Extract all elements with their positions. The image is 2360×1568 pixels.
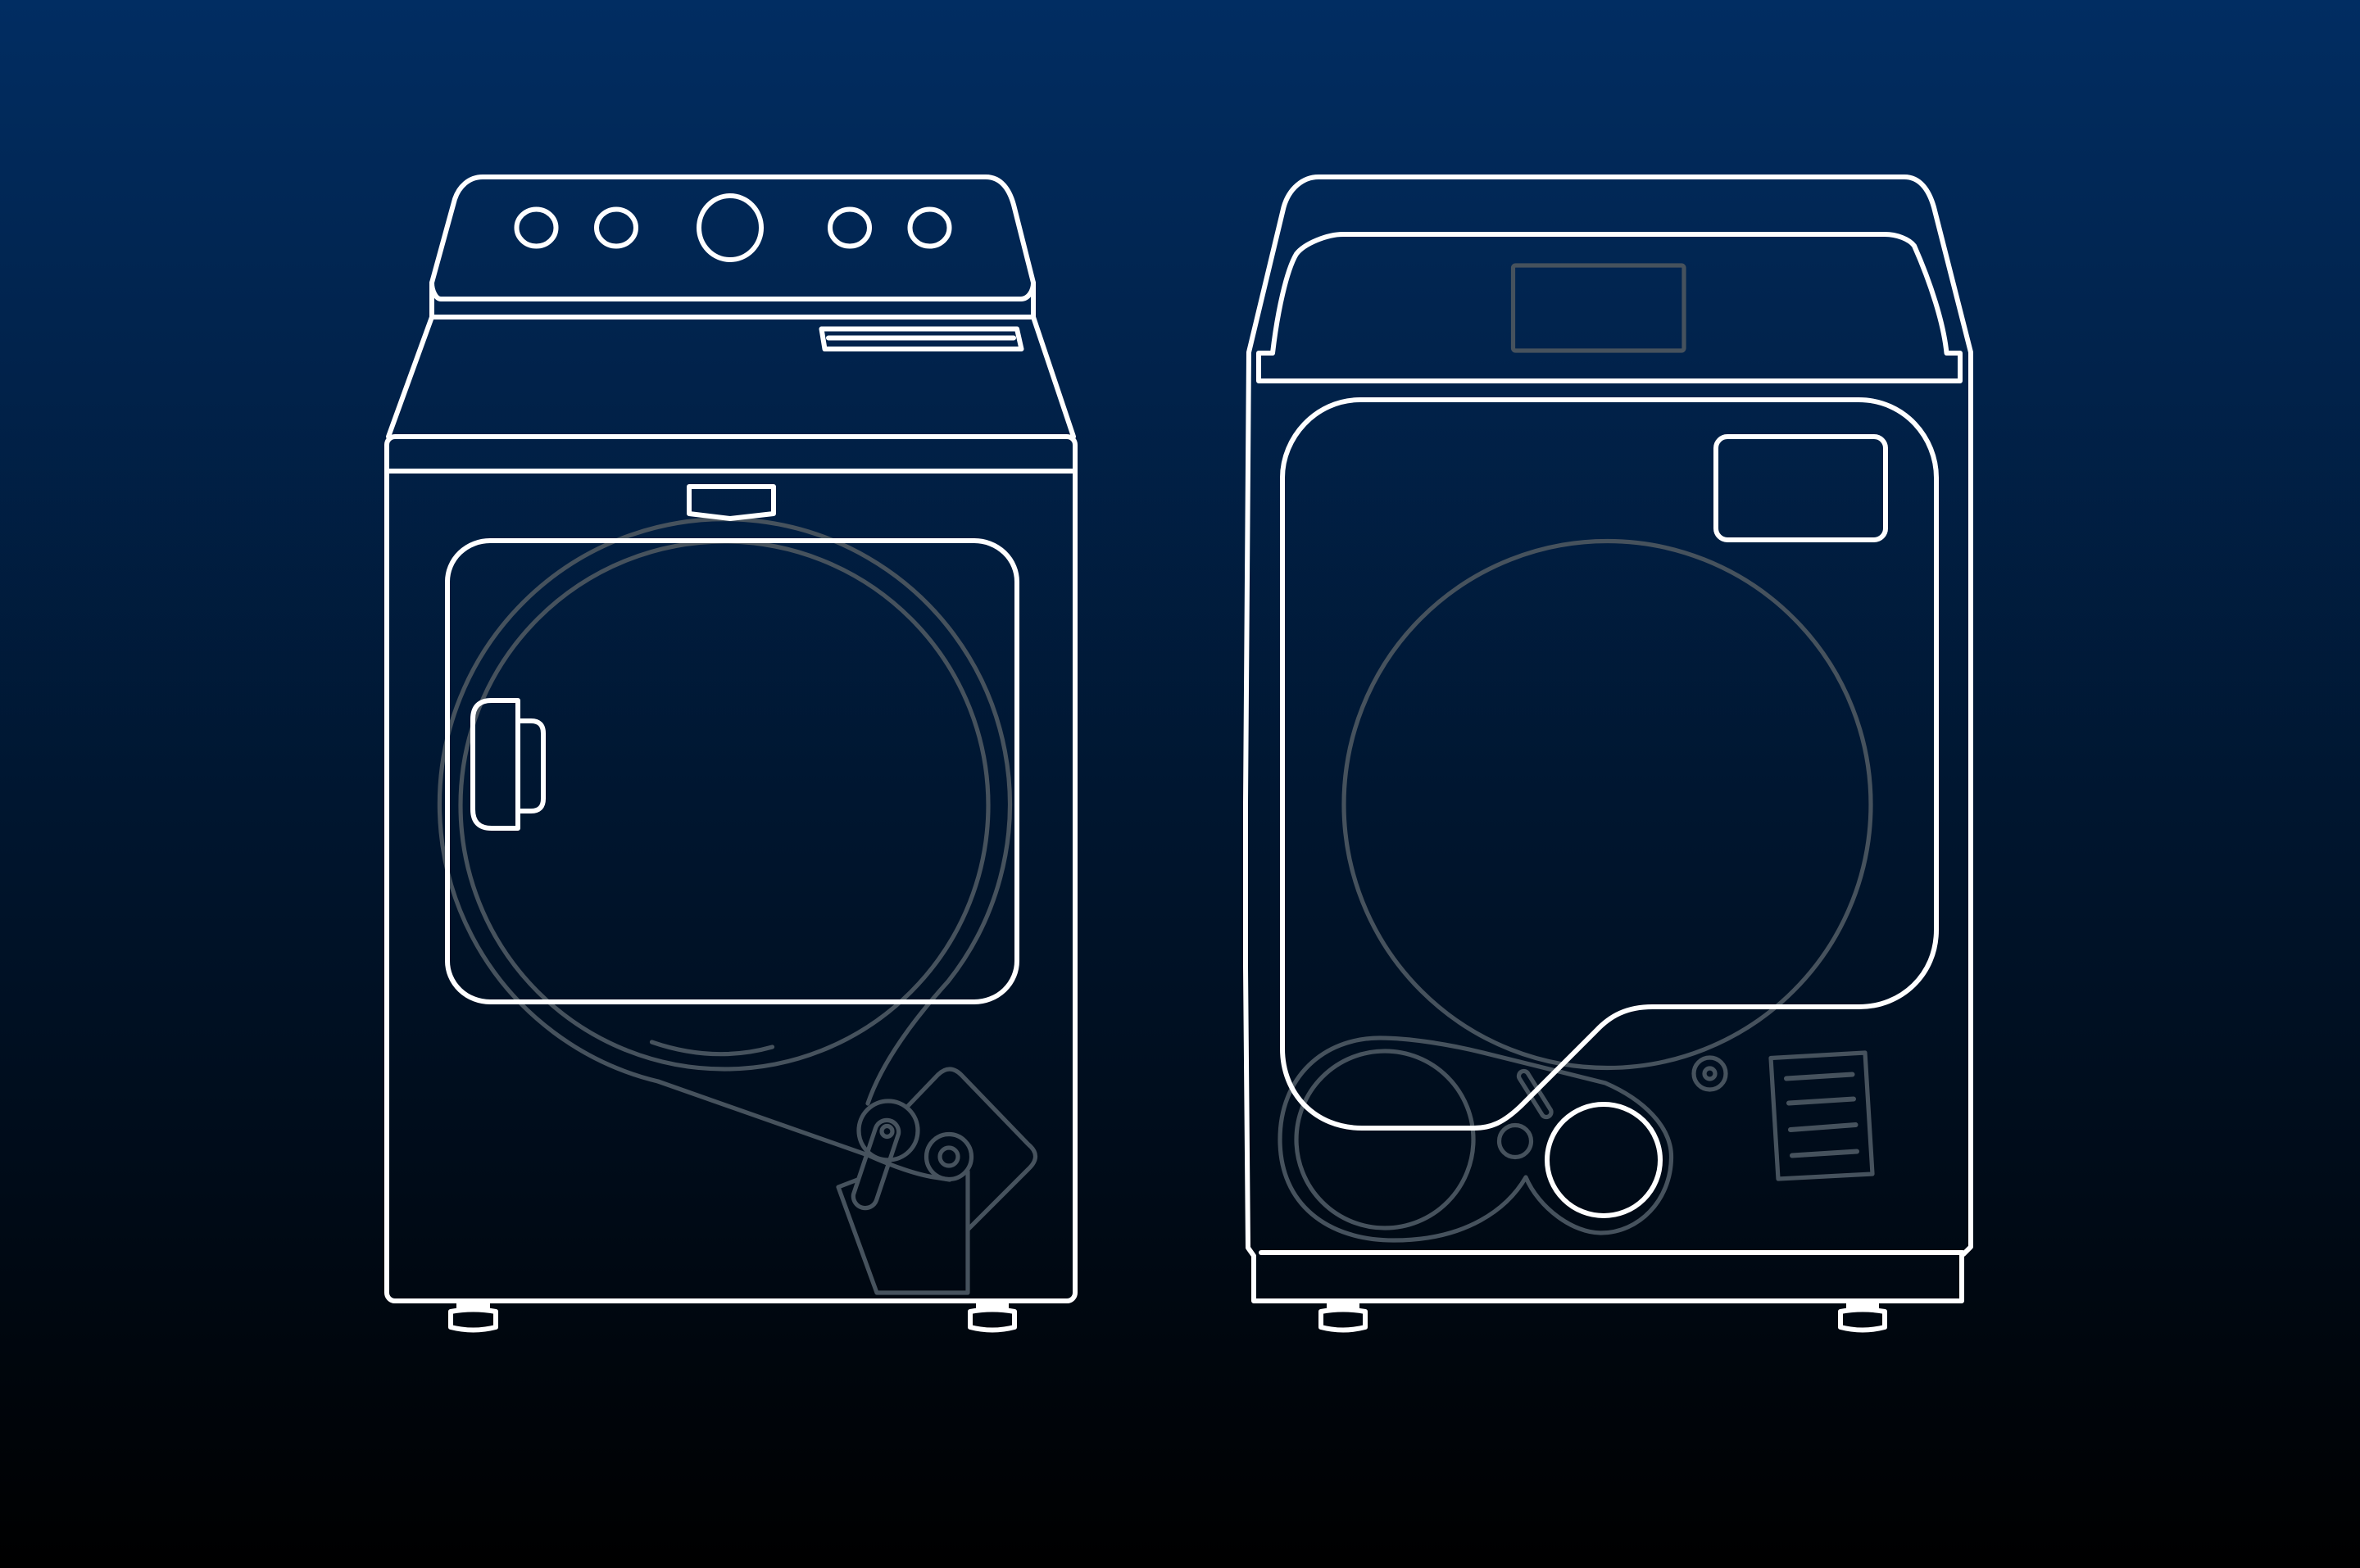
top lid (388, 317, 1073, 437)
control knobs (516, 196, 949, 260)
rear access panel (1282, 400, 1936, 1128)
hidden internals: motor and pulleys (838, 1069, 1036, 1293)
feet (451, 1303, 1014, 1330)
console base (432, 283, 1033, 317)
top rear cap (1259, 234, 1960, 381)
door latch (689, 487, 774, 519)
dryer: rear view (1246, 177, 1971, 1330)
door outline (447, 541, 1017, 1002)
hidden internals: drum and belt (439, 519, 1010, 1180)
cabinet body (387, 437, 1075, 1301)
feet (1321, 1303, 1885, 1330)
hidden internals: heat exchanger duct (1280, 1038, 1726, 1240)
control console (432, 177, 1033, 299)
hidden internals: rear drum circle (1344, 541, 1871, 1068)
cabinet outer shell (1246, 177, 1971, 1301)
vent outlet circle (1547, 1104, 1660, 1216)
lint filter slot (821, 329, 1021, 349)
cabinet top band line (387, 469, 1075, 474)
hidden internals: label sheet (1771, 1053, 1872, 1179)
access cover (1716, 437, 1886, 540)
base line (1261, 1250, 1963, 1255)
door handle (473, 700, 543, 828)
hidden internals: rating plate (1513, 265, 1684, 351)
dryer: front view (387, 177, 1075, 1330)
